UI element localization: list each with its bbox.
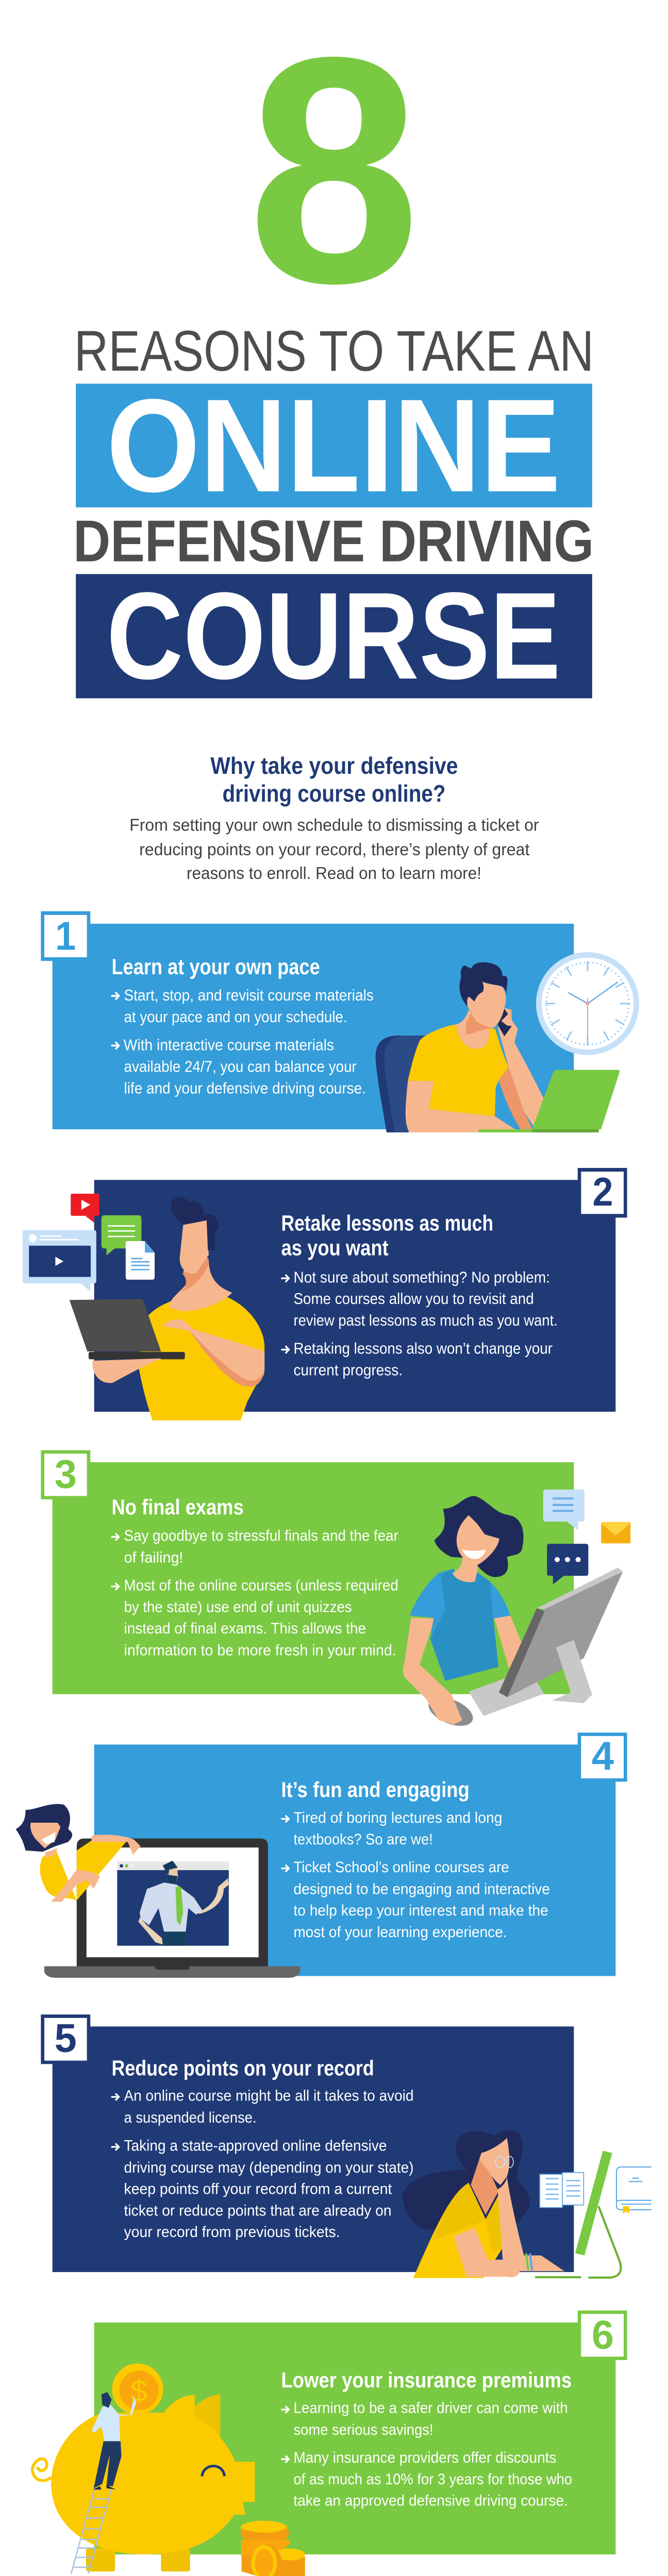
man figure [406, 962, 545, 1132]
bullet list: ticket or reduce points that are already on [124, 2202, 392, 2219]
wall clock [536, 952, 639, 1055]
panel 5: reduce points [43, 2016, 574, 2272]
bullet list: Start, stop, and revisit course materials [124, 987, 374, 1004]
number badge 5: 5 [55, 2016, 77, 2060]
bullet list: driving course may (depending on your state) [124, 2159, 414, 2176]
icon: light chat bubble [543, 1489, 584, 1530]
panel 4: fun and engaging [16, 1734, 625, 1978]
heading: Lower your insurance premiums [281, 2368, 572, 2392]
number badge 6: 6 [592, 2313, 614, 2358]
bullet list: information to be more fresh in your mind. [124, 1642, 396, 1659]
panel 1: learn at your own pace [43, 913, 639, 1132]
bullet list: life and your defensive driving course. [124, 1080, 366, 1097]
icon: dollar coin [112, 2363, 163, 2415]
number badge 2 [579, 1170, 625, 1216]
heading: defensive driving: DEFENSIVE DRIVING [73, 509, 594, 574]
bullet list: available 24/7, you can balance your [124, 1058, 357, 1076]
banner: course: COURSE [107, 567, 561, 705]
ladder [71, 2488, 112, 2573]
panel 3: no final exams [43, 1452, 630, 1732]
bullet list: some serious savings! [293, 2421, 433, 2438]
bullet list: of failing! [124, 1549, 183, 1566]
bullet list: at your pace and on your schedule. [124, 1009, 347, 1026]
desk: keyboard and mouse [425, 1677, 544, 1732]
illustration: man on phone with clock and laptop [376, 952, 639, 1132]
woman leaning over laptop [16, 1804, 141, 1902]
number badge 3: 3 [55, 1452, 77, 1497]
intro paragraph: From setting your own schedule to dismissing a ticket or [129, 815, 539, 835]
bullet list: take an approved defensive driving course. [293, 2493, 568, 2510]
icon: video window [23, 1230, 96, 1292]
man climbing [92, 2392, 136, 2489]
intro heading [210, 753, 458, 807]
piggy bank [32, 2394, 255, 2571]
bullet list [111, 987, 374, 1097]
intro heading: Why take your defensive [210, 753, 458, 779]
icon: video play badge [71, 1194, 99, 1223]
panel background [53, 924, 574, 1129]
bullet list [111, 1528, 398, 1659]
bullet list: your record from previous tickets. [124, 2224, 340, 2241]
heading: Retake lessons as much [281, 1211, 493, 1235]
green computer [535, 2151, 621, 2278]
number badge 6 [579, 2312, 625, 2359]
bullet list: Say goodbye to stressful finals and the fear [124, 1528, 398, 1545]
intro paragraph: reducing points on your record, there’s plenty of great [139, 840, 530, 859]
laptop with instructor video [44, 1839, 300, 1978]
chair [376, 1036, 427, 1132]
bullet list [111, 2088, 414, 2241]
bullet list: Not sure about something? No problem: [293, 1269, 550, 1286]
panel background [53, 2026, 574, 2272]
icon: open book [540, 2173, 583, 2208]
icon: envelope [601, 1522, 630, 1544]
intro section [129, 753, 539, 883]
bullet list: most of your learning experience. [293, 1924, 507, 1941]
bullet list: Taking a state-approved online defensive [124, 2138, 387, 2155]
bullet list [281, 1269, 558, 1379]
heading: Reduce points on your record [112, 2057, 374, 2080]
bullet list: of as much as 10% for 3 years for those who [293, 2471, 572, 2488]
illustration: woman with glasses at green computer [403, 2130, 652, 2278]
panel 6: lower insurance premiums [32, 2312, 625, 2576]
bullet list: keep points off your record from a current [124, 2180, 392, 2197]
panel 2: retake lessons [23, 1170, 625, 1420]
heading: as you want [281, 1235, 389, 1260]
icon: document [126, 1241, 155, 1280]
panel background [94, 1744, 615, 1976]
smiling woman [403, 1496, 524, 1724]
icon: green chat [102, 1215, 141, 1256]
heading: It’s fun and engaging [281, 1778, 470, 1802]
number badge 4: 4 [592, 1734, 614, 1778]
bullet list: Most of the online courses (unless required [124, 1577, 398, 1594]
green laptop [479, 1070, 620, 1132]
computer monitor [499, 1568, 623, 1703]
number badge 5 [43, 2016, 89, 2062]
bullet list: Many insurance providers offer discounts [293, 2449, 556, 2466]
bullet list: Retaking lessons also won’t change your [293, 1341, 553, 1358]
icon: dark chat bubble [547, 1544, 588, 1584]
intro heading: driving course online? [222, 781, 446, 807]
number badge 1: 1 [55, 913, 76, 958]
header title block [73, 0, 594, 705]
bullet list: Some courses allow you to revisit and [293, 1291, 534, 1308]
bullet list: Tired of boring lectures and long [293, 1809, 502, 1826]
intro paragraph: reasons to enroll. Read on to learn more! [187, 863, 481, 883]
bullet list: designed to be engaging and interactive [293, 1880, 550, 1897]
banner: online: ONLINE [107, 371, 561, 520]
icon: closed book [616, 2167, 652, 2213]
heading [281, 1211, 493, 1260]
panel background [94, 2323, 615, 2554]
bullet list: a suspended license. [124, 2109, 257, 2126]
bullet list: to help keep your interest and make the [293, 1902, 548, 1919]
long hair [403, 2130, 530, 2230]
number badge 3 [43, 1452, 89, 1498]
woman body [413, 2138, 564, 2278]
bullet list: review past lessons as much as you want. [293, 1312, 558, 1329]
bullet list: textbooks? So are we! [293, 1831, 433, 1848]
big green number 8: 8 [248, 0, 420, 350]
heading: No final exams [112, 1495, 244, 1519]
bullet list: Learning to be a safer driver can come with [293, 2400, 568, 2417]
number badge 1 [43, 913, 89, 959]
bullet list [281, 1809, 550, 1941]
intro paragraph [129, 815, 539, 883]
number badge 2: 2 [593, 1170, 613, 1214]
bullet list: An online course might be all it takes to avoid [124, 2088, 414, 2105]
bullet list: instead of final exams. This allows the [124, 1620, 366, 1637]
bullet list [281, 2400, 572, 2510]
heading: reasons to take an: REASONS TO TAKE AN [74, 319, 594, 383]
panel background [94, 1180, 615, 1412]
icon: dollar coin: $ [130, 2375, 147, 2408]
coin stack [241, 2521, 305, 2576]
bullet list: by the state) use end of unit quizzes [124, 1599, 352, 1616]
bullet list: With interactive course materials [124, 1037, 334, 1054]
panel background [53, 1462, 574, 1694]
heading: Learn at your own pace [112, 955, 320, 979]
bullet list: current progress. [293, 1362, 403, 1379]
number badge 4 [579, 1734, 625, 1780]
man holding laptop [70, 1197, 264, 1420]
bullet list: Ticket School’s online courses are [293, 1859, 509, 1876]
